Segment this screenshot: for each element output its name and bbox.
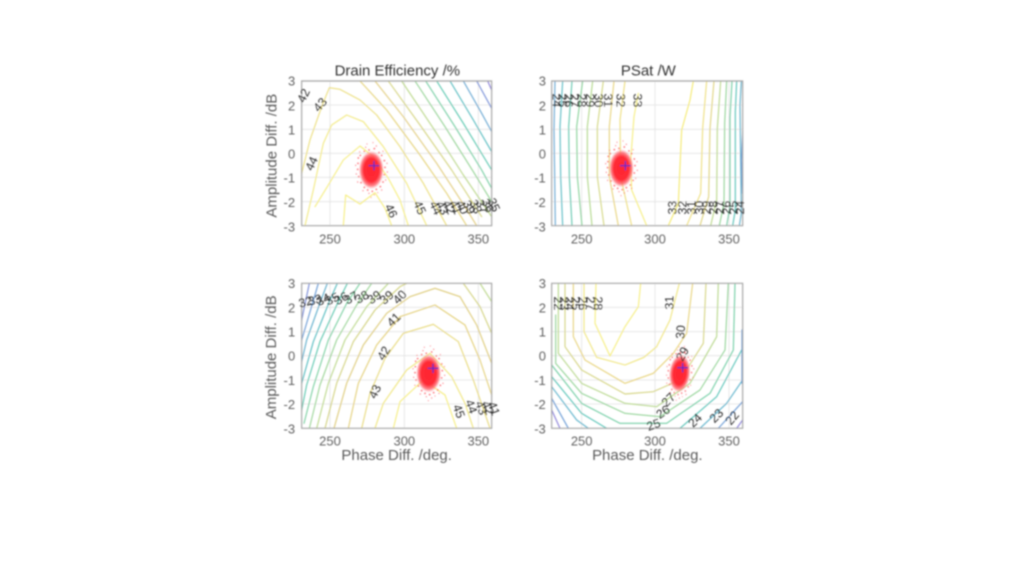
contour labels: 39 bbox=[460, 198, 478, 217]
contour labels: 38 bbox=[353, 288, 372, 307]
x axis label: Phase Diff. /deg. bbox=[341, 447, 452, 464]
contour labels: 25 bbox=[568, 296, 582, 310]
contour labels: 26 bbox=[720, 201, 734, 215]
contour labels: 29 bbox=[583, 93, 597, 107]
scatter cloud bbox=[412, 345, 445, 401]
contour lines: PSat bottom bbox=[552, 283, 743, 428]
optimum marker bbox=[677, 363, 688, 372]
contour labels: 43 bbox=[472, 399, 490, 417]
contour labels: 28 bbox=[591, 296, 605, 310]
contour labels: 25 bbox=[645, 416, 663, 434]
tick labels: 3 bbox=[539, 276, 546, 291]
contour labels: 41 bbox=[485, 400, 503, 418]
tick labels: 1 bbox=[288, 122, 295, 137]
tick labels: -2 bbox=[284, 195, 295, 210]
contour labels: 29 bbox=[673, 344, 692, 363]
contour labels: 34 bbox=[314, 290, 333, 309]
axes frame bbox=[552, 81, 743, 226]
tick labels: 350 bbox=[467, 434, 489, 449]
contour labels: 45 bbox=[410, 198, 429, 217]
contour labels bbox=[550, 93, 747, 215]
tick labels: 250 bbox=[571, 434, 593, 449]
title: Drain Efficiency /% bbox=[335, 63, 460, 80]
contour labels: 36 bbox=[478, 196, 497, 215]
contour labels: 26 bbox=[653, 402, 673, 422]
tick labels: -1 bbox=[534, 171, 546, 186]
contour labels: 43 bbox=[366, 382, 384, 401]
contour labels: 44 bbox=[426, 199, 445, 217]
tick labels: 350 bbox=[718, 434, 740, 449]
x axis label: Phase Diff. /deg. bbox=[592, 447, 703, 464]
contour labels: 44 bbox=[462, 398, 480, 416]
contour labels: 33 bbox=[307, 292, 324, 309]
contour lines: drain efficiency bottom bbox=[302, 283, 492, 428]
contour labels: 32 bbox=[676, 201, 690, 215]
optimum marker bbox=[369, 161, 379, 170]
contour labels: 42 bbox=[374, 344, 393, 363]
contour labels: 30 bbox=[673, 324, 688, 339]
tick labels: 3 bbox=[288, 276, 295, 291]
contour labels: 23 bbox=[707, 406, 726, 426]
contour labels: 28 bbox=[706, 201, 720, 215]
tick labels: -3 bbox=[534, 219, 546, 234]
contour labels: 22 bbox=[722, 408, 742, 428]
contour labels: 33 bbox=[666, 201, 680, 215]
tick labels bbox=[284, 276, 489, 449]
tick labels: 1 bbox=[539, 122, 546, 137]
contour labels: 42 bbox=[479, 399, 497, 417]
optimum marker bbox=[620, 161, 631, 170]
contour labels: 36 bbox=[332, 289, 351, 308]
contour labels: 31 bbox=[684, 201, 698, 215]
scatter cloud bbox=[663, 343, 697, 403]
contour labels: 37 bbox=[472, 197, 491, 216]
tick labels: 300 bbox=[393, 434, 415, 449]
contour labels: 24 bbox=[733, 201, 747, 215]
tick labels: 3 bbox=[539, 74, 546, 89]
tick labels: 3 bbox=[288, 74, 295, 89]
contour labels: 40 bbox=[390, 287, 410, 307]
contour labels: 26 bbox=[576, 296, 590, 310]
axes frame bbox=[302, 81, 492, 226]
scatter cloud bbox=[605, 140, 638, 196]
tick labels: 1 bbox=[288, 325, 295, 340]
panel: PSat bottom-right bbox=[534, 276, 743, 464]
contour labels: 30 bbox=[592, 93, 606, 107]
contour labels: 38 bbox=[466, 197, 485, 216]
tick labels: -1 bbox=[284, 171, 295, 186]
optimum marker bbox=[428, 364, 438, 373]
contour labels: 31 bbox=[601, 93, 615, 107]
tick labels: 0 bbox=[539, 349, 546, 364]
contour labels: 30 bbox=[692, 201, 706, 215]
contour labels: 39 bbox=[365, 288, 384, 307]
contour labels: 26 bbox=[562, 93, 576, 107]
contour labels: 45 bbox=[450, 402, 468, 420]
contour labels: 22 bbox=[551, 296, 565, 310]
panel: PSat top-right bbox=[534, 63, 747, 246]
tick labels: -2 bbox=[284, 397, 295, 412]
tick labels: -2 bbox=[534, 397, 546, 412]
tick labels: 350 bbox=[718, 231, 740, 246]
contour labels: 41 bbox=[384, 310, 404, 330]
panel: drain efficiency top-left bbox=[264, 63, 503, 246]
contour labels: 42 bbox=[294, 86, 313, 105]
contour labels: 32 bbox=[614, 93, 628, 107]
contour lines: drain efficiency top bbox=[302, 81, 492, 226]
contour labels: 27 bbox=[659, 390, 678, 410]
contour labels: 35 bbox=[323, 290, 342, 308]
tick labels: 0 bbox=[288, 146, 295, 161]
contour labels: 33 bbox=[630, 93, 644, 107]
tick labels: 250 bbox=[319, 434, 341, 449]
tick labels: 250 bbox=[319, 231, 341, 246]
y axis label: Amplitude Diff. /dB bbox=[263, 295, 280, 419]
contour lines: PSat top bbox=[554, 81, 743, 226]
scatter cloud bbox=[355, 142, 388, 198]
y axis label: Amplitude Diff. /dB bbox=[264, 94, 281, 218]
contour labels: 46 bbox=[382, 202, 400, 220]
contour labels: 43 bbox=[433, 199, 452, 217]
contour labels: 35 bbox=[484, 196, 503, 214]
tick labels: 2 bbox=[539, 300, 546, 315]
contour labels bbox=[551, 296, 742, 434]
contour labels: 24 bbox=[550, 93, 564, 107]
contour labels: 29 bbox=[700, 201, 714, 215]
contour labels: 40 bbox=[453, 198, 472, 217]
contour labels: 24 bbox=[685, 411, 705, 430]
contour labels bbox=[294, 86, 503, 220]
tick labels: 250 bbox=[571, 231, 593, 246]
tick labels: -2 bbox=[534, 195, 546, 210]
axes frame bbox=[552, 283, 743, 428]
tick labels bbox=[284, 74, 489, 246]
tick labels: -3 bbox=[534, 422, 546, 437]
tick labels: 2 bbox=[288, 300, 295, 315]
contour labels: 27 bbox=[568, 93, 582, 107]
tick labels: 0 bbox=[288, 349, 295, 364]
contour labels: 37 bbox=[342, 288, 361, 307]
contour labels: 43 bbox=[310, 95, 330, 115]
contour labels bbox=[297, 287, 503, 420]
contour labels: 27 bbox=[584, 296, 598, 310]
tick labels bbox=[534, 74, 740, 246]
tick labels: 300 bbox=[393, 231, 415, 246]
tick labels bbox=[534, 276, 740, 449]
tick labels: 2 bbox=[539, 98, 546, 113]
tick labels: 300 bbox=[644, 231, 666, 246]
contour labels: 23 bbox=[557, 296, 571, 310]
tick labels: 1 bbox=[539, 325, 546, 340]
tick labels: 350 bbox=[467, 231, 489, 246]
contour labels: 27 bbox=[713, 201, 727, 215]
tick labels: -1 bbox=[284, 373, 295, 388]
contour labels: 28 bbox=[574, 93, 588, 107]
tick labels: 2 bbox=[288, 98, 295, 113]
contour labels: 25 bbox=[726, 201, 740, 215]
contour labels: 42 bbox=[440, 198, 458, 217]
contour labels: 44 bbox=[302, 154, 321, 173]
tick labels: -1 bbox=[534, 373, 546, 388]
tick labels: -3 bbox=[284, 422, 295, 437]
tick labels: 300 bbox=[644, 434, 666, 449]
tick labels: -3 bbox=[284, 219, 295, 234]
contour labels: 31 bbox=[662, 296, 676, 310]
tick labels: 0 bbox=[539, 146, 546, 161]
panel: drain efficiency bottom-left bbox=[263, 276, 503, 464]
contour labels: 32 bbox=[297, 294, 314, 311]
contour labels: 39 bbox=[377, 288, 397, 307]
title: PSat /W bbox=[621, 63, 677, 80]
contour labels: 25 bbox=[556, 93, 570, 107]
axes frame bbox=[302, 283, 492, 428]
contour labels: 24 bbox=[562, 296, 576, 310]
contour labels: 41 bbox=[446, 198, 465, 217]
